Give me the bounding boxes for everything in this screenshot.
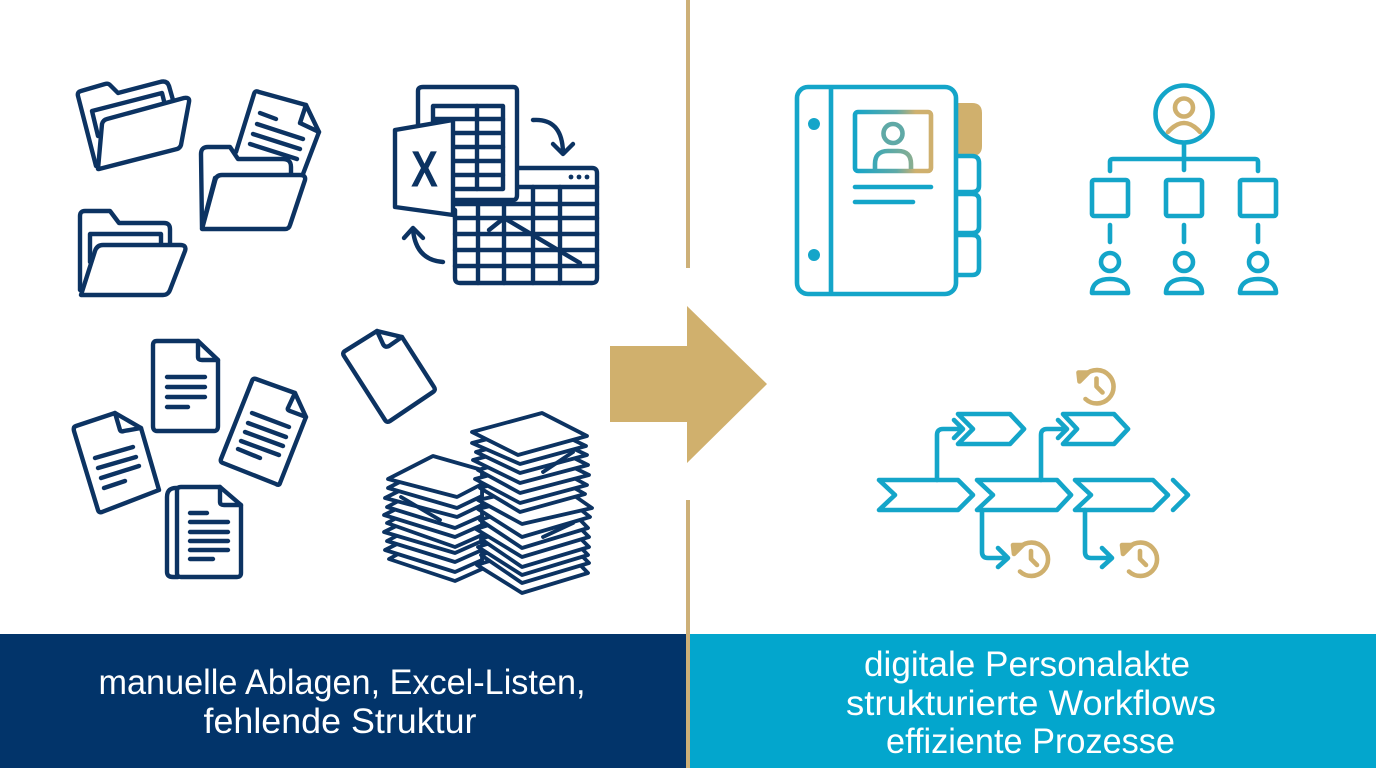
icon: tilted document left — [74, 413, 159, 512]
main process chevrons — [879, 480, 1188, 510]
icon: tilted document right — [221, 379, 306, 485]
icon: folder bottom left — [80, 211, 185, 295]
icon: scattered documents — [74, 341, 306, 577]
right banner text: strukturierte Workflows — [846, 684, 1216, 723]
left banner text: manuelle Ablagen, Excel-Listen, — [98, 663, 586, 702]
icon: org chart — [1092, 86, 1276, 293]
icon: clock bottom right — [1122, 543, 1157, 576]
icon: digital personnel file — [797, 87, 982, 294]
upper branch chevrons — [958, 414, 1128, 444]
arrow: transition from left to right — [610, 306, 767, 463]
bottom right table — [455, 168, 597, 283]
gold tab — [956, 103, 982, 156]
icon: stacked document — [167, 487, 241, 577]
icon: upright document — [153, 341, 218, 431]
icon: clock bottom left — [1013, 543, 1048, 576]
panel: right banner — [690, 634, 1376, 768]
excel cover with X: X — [411, 140, 438, 198]
arrow: clockwise bottom — [404, 228, 443, 262]
left stack — [384, 456, 482, 581]
right banner text: digitale Personalakte — [864, 645, 1190, 684]
binder holes — [808, 118, 820, 261]
icon: loose page — [343, 331, 435, 422]
connectors — [1110, 143, 1258, 242]
manager circle with gold person — [1156, 86, 1212, 142]
arrow: clockwise top — [533, 120, 573, 154]
left banner text: fehlende Struktur — [204, 702, 477, 741]
photo with person — [855, 112, 931, 171]
icon: document in folder — [236, 91, 319, 174]
icon: paper stacks — [384, 413, 592, 593]
text lines — [855, 187, 931, 202]
icon: folders — [78, 82, 319, 295]
right banner text: effiziente Prozesse — [886, 722, 1175, 761]
icon: folder top left — [78, 82, 189, 169]
panel: left banner — [0, 634, 686, 768]
binder spine — [829, 88, 833, 293]
excel cover with X — [395, 120, 453, 215]
branch arrows — [937, 420, 1112, 567]
icon: clock top — [1078, 370, 1114, 403]
right stack — [472, 413, 592, 593]
icon: excel spreadsheets — [395, 87, 597, 283]
role boxes — [1092, 180, 1276, 216]
back sheet — [418, 87, 517, 200]
index tabs — [957, 156, 979, 275]
icon: folder top right — [201, 147, 305, 229]
window dots — [569, 175, 589, 179]
icon: structured workflow — [879, 370, 1188, 576]
employees — [1092, 253, 1276, 293]
binder cover — [797, 87, 956, 294]
